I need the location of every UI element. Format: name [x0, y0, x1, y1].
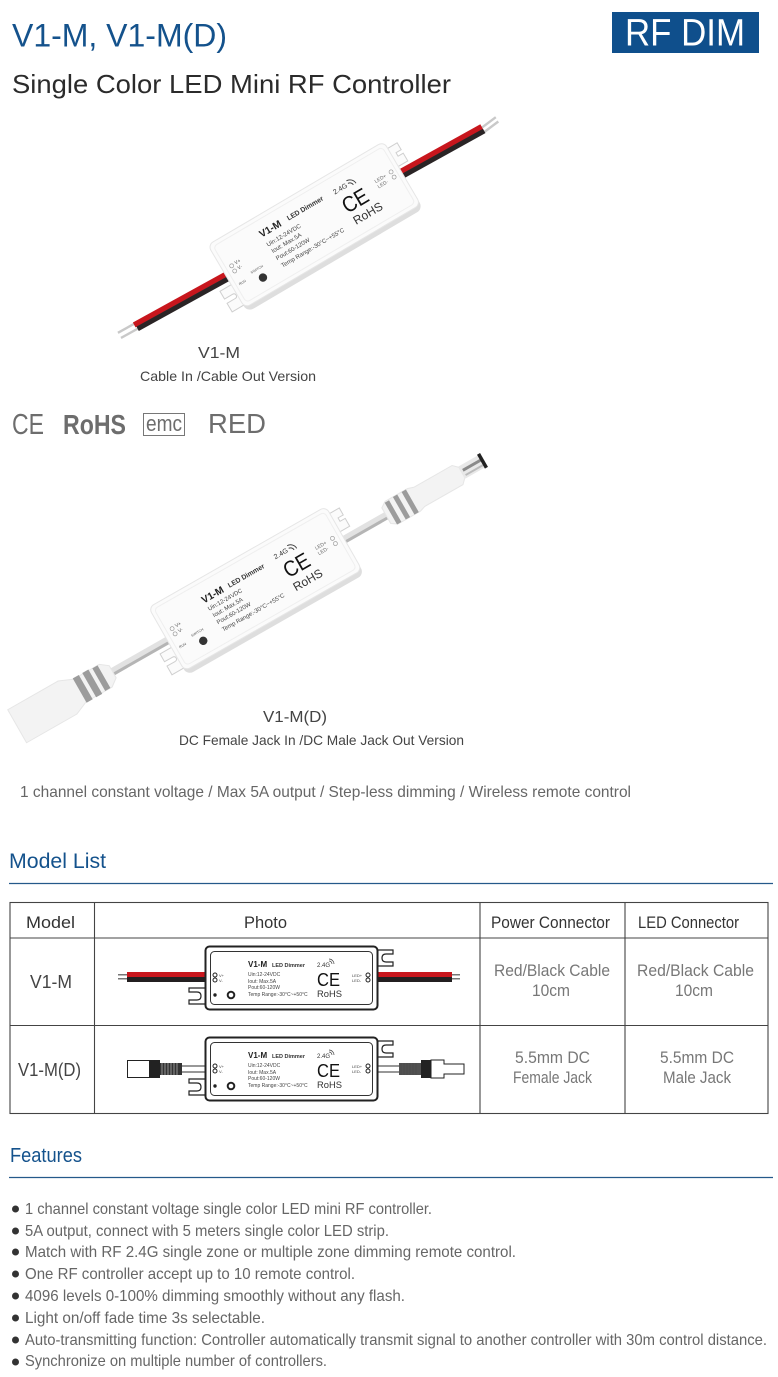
- summary line: 1 channel constant voltage / Max 5A output / Step-less dimming / Wireless remote control: [20, 784, 631, 801]
- product photo: V1-M cable version: LED+: [374, 173, 388, 185]
- product photo: V1-M(D) DC jack version: CE: [279, 548, 314, 583]
- subtitle: Single Color LED Mini RF Controller: [12, 69, 451, 99]
- certification logos: [12, 408, 266, 441]
- table row: V1-M(D): Temp Range:-30°C~+50°C: [248, 1083, 308, 1089]
- product photo: V1-M cable version: CE: [337, 183, 373, 218]
- table header: Power Connector: [491, 913, 610, 932]
- table row: V1-M: V+: [219, 973, 225, 978]
- product photo: V1-M(D) DC jack version: Uin:12-24VDC: [207, 588, 244, 613]
- feature list: One RF controller accept up to 10 remote control.: [25, 1266, 355, 1283]
- product photo: V1-M cable version: LED Dimmer: [286, 195, 325, 222]
- table row: V1-M: [30, 946, 754, 1010]
- table header: Photo: [244, 913, 287, 932]
- table row: V1-M(D): RoHS: [317, 1080, 342, 1091]
- product photo: V1-M cable version: Pout:60-120W: [275, 237, 312, 262]
- table row: V1-M: 2.4G: [317, 963, 330, 969]
- table row: V1-M: V-: [219, 978, 223, 983]
- product photo: V1-M cable version: Temp Range:-30°C~+55°C: [281, 227, 346, 269]
- product photo: V1-M(D) DC jack version: Iout: Max.5A: [212, 597, 244, 619]
- table row: V1-M(D): Pout:60-120W: [248, 1076, 280, 1082]
- table row: V1-M(D): V+: [219, 1064, 225, 1069]
- table row: V1-M(D): LED-: [352, 1069, 362, 1074]
- table row: V1-M: CE: [317, 970, 340, 990]
- table row: V1-M: 10cm: [675, 981, 713, 1000]
- table header: [26, 913, 739, 932]
- product photo: V1-M(D) DC jack version: V-: [177, 627, 184, 634]
- certification logos: RoHS: [63, 409, 126, 440]
- heading: Features: Features: [10, 1145, 82, 1167]
- badge: RF DIM: RF DIM: [625, 12, 745, 54]
- caption: V1-M: Cable In /Cable Out Version: [140, 368, 316, 384]
- feature list: Light on/off fade time 3s selectable.: [25, 1310, 265, 1327]
- feature list: Synchronize on multiple number of controllers.: [25, 1353, 327, 1370]
- product photo: V1-M cable version: [103, 86, 517, 374]
- product photo: V1-M(D) DC jack version: V+: [174, 621, 183, 629]
- table row: V1-M(D): Uin:12-24VDC: [248, 1063, 281, 1069]
- table row: V1-M: Red/Black Cable: [637, 961, 754, 980]
- table row: V1-M: RoHS: [317, 989, 342, 1000]
- table row: V1-M(D): 5.5mm DC: [515, 1048, 590, 1067]
- table row: V1-M: 10cm: [532, 981, 570, 1000]
- product photo: V1-M cable version: Iout: Max.5A: [271, 233, 303, 255]
- panel: model table: [10, 902, 768, 1114]
- feature list: [12, 1201, 767, 1370]
- table row: V1-M(D): Male Jack: [663, 1068, 731, 1087]
- table row: V1-M: Pout:60-120W: [248, 985, 280, 991]
- table row: V1-M(D): V1-M(D): [18, 1060, 81, 1080]
- product photo: V1-M(D) DC jack version: LED Dimmer: [227, 563, 266, 590]
- table row: V1-M: Red/Black Cable: [494, 961, 610, 980]
- feature list: Match with RF 2.4G single zone or multiple zone dimming remote control.: [25, 1244, 516, 1261]
- product photo: V1-M cable version: SWITCH: [250, 264, 264, 275]
- caption: V1-M(D): [179, 709, 464, 748]
- table row: V1-M(D): Iout: Max.5A: [248, 1070, 277, 1076]
- product photo: V1-M(D) DC jack version: V1-M: [200, 585, 226, 606]
- feature list: 4096 levels 0-100% dimming smoothly without any flash.: [25, 1288, 405, 1305]
- table row: V1-M(D): Female Jack: [513, 1068, 592, 1087]
- product photo: V1-M(D) DC jack version: RoHS: [290, 566, 325, 594]
- product photo: V1-M(D) DC jack version: [0, 427, 504, 761]
- feature list: 5A output, connect with 5 meters single color LED strip.: [25, 1223, 389, 1240]
- product photo: V1-M(D) DC jack version: LED+: [314, 540, 328, 552]
- product photo: V1-M(D) DC jack version: RUN: [178, 642, 187, 649]
- certification logos: CE: [12, 409, 44, 441]
- table row: V1-M(D): CE: [317, 1061, 340, 1081]
- product photo: V1-M(D) DC jack version: 2.4G: [273, 548, 290, 561]
- table header: LED Connector: [638, 913, 739, 932]
- product photo: V1-M(D) DC jack version: LED-: [317, 546, 330, 557]
- table row: V1-M(D): LED+: [352, 1064, 363, 1069]
- table row: V1-M: LED-: [352, 978, 362, 983]
- table header: Model: [26, 913, 75, 932]
- caption: V1-M: V1-M: [198, 345, 240, 362]
- feature list: 1 channel constant voltage single color LED mini RF controller.: [25, 1201, 432, 1218]
- product photo: V1-M(D) DC jack version: Temp Range:-30°C~+55°C: [221, 593, 287, 633]
- table row: V1-M: Iout: Max.5A: [248, 979, 277, 985]
- product photo: V1-M cable version: LED-: [377, 179, 390, 190]
- product photo: V1-M(D) DC jack version: SWITCH: [190, 627, 205, 638]
- product photo: V1-M cable version: V-: [237, 264, 244, 272]
- table row: V1-M(D): V-: [219, 1069, 223, 1074]
- product photo: V1-M cable version: Uin:12-24VDC: [266, 223, 303, 248]
- product photo: V1-M(D) DC jack version: Pout:60-120W: [216, 602, 253, 626]
- certification logos: RED: [208, 408, 266, 439]
- product photo: V1-M cable version: V1-M: [258, 219, 284, 240]
- table row: V1-M: LED+: [352, 973, 363, 978]
- product photo: V1-M cable version: RUN: [238, 279, 247, 286]
- table row: V1-M: LED Dimmer: [272, 963, 306, 969]
- product photo: V1-M cable version: RoHS: [351, 199, 385, 228]
- table row: V1-M(D): V1-M: [248, 1051, 267, 1060]
- table row: V1-M(D): 2.4G: [317, 1054, 330, 1060]
- certification logos: emc: [146, 411, 182, 436]
- caption: V1-M(D): DC Female Jack In /DC Male Jack Out Version: [179, 732, 464, 748]
- table row: V1-M(D): 5.5mm DC: [660, 1048, 734, 1067]
- product photo: V1-M cable version: V+: [234, 258, 242, 266]
- caption: V1-M: [140, 345, 316, 384]
- table row: V1-M(D): LED Dimmer: [272, 1054, 306, 1060]
- title: V1-M, V1-M(D): [12, 18, 227, 54]
- table row: V1-M: V1-M: [248, 960, 267, 969]
- table row: V1-M: Temp Range:-30°C~+50°C: [248, 992, 308, 998]
- table row: V1-M: Uin:12-24VDC: [248, 972, 281, 978]
- table row: V1-M: V1-M: [30, 972, 72, 992]
- heading: Model List: Model List: [9, 850, 106, 873]
- table row: V1-M(D): [18, 1038, 734, 1100]
- product photo: V1-M cable version: 2.4G: [332, 183, 349, 196]
- caption: V1-M(D): V1-M(D): [263, 709, 327, 726]
